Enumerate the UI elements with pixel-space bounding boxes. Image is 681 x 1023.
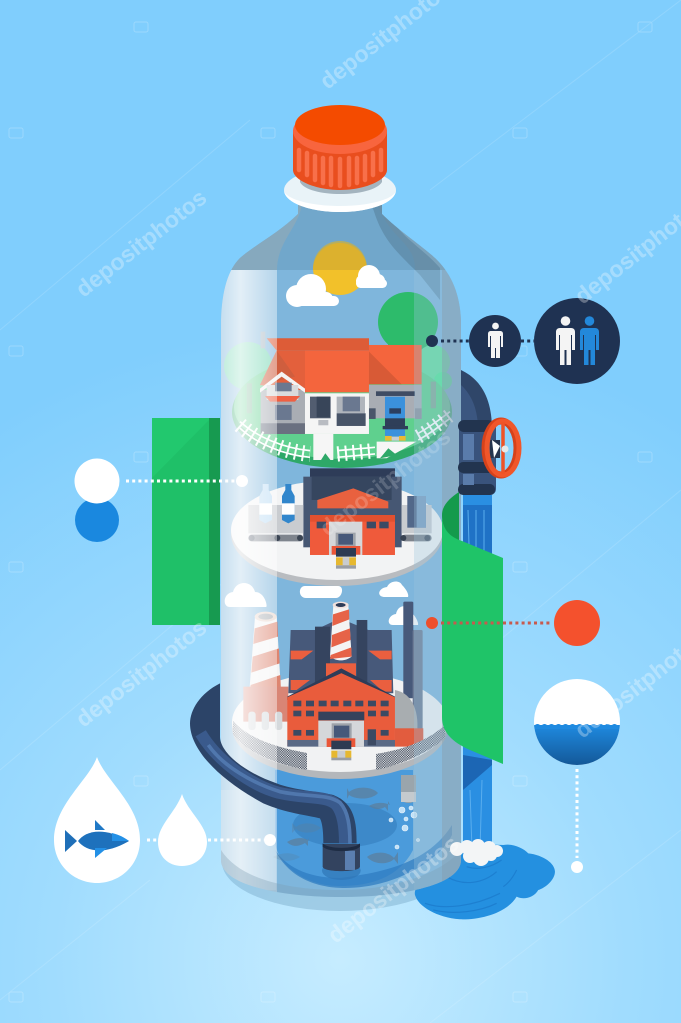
path bbox=[313, 434, 417, 460]
entry bbox=[305, 393, 369, 434]
heavy factory bbox=[243, 602, 423, 760]
left bay bbox=[260, 372, 305, 434]
icon: white person bbox=[556, 316, 575, 365]
wide water bottom bbox=[275, 825, 452, 888]
annex right bbox=[395, 728, 423, 747]
valve wheel bbox=[485, 421, 519, 475]
tree bbox=[224, 292, 452, 390]
icon: small person bbox=[488, 323, 503, 358]
bottle cap and collar bbox=[284, 105, 396, 212]
watermark: depositphotos bbox=[71, 184, 211, 302]
icon: blue person bbox=[580, 316, 599, 365]
waterfall from pipe bbox=[463, 495, 492, 855]
shrubs bbox=[320, 448, 397, 462]
green ribbon right bbox=[442, 492, 503, 764]
truck bbox=[327, 723, 355, 760]
low annex bbox=[243, 687, 288, 730]
collar bbox=[323, 843, 360, 871]
rear pipes bbox=[395, 602, 423, 737]
front hall bbox=[287, 668, 395, 747]
clouds mid bbox=[225, 581, 418, 625]
roof bbox=[260, 332, 422, 392]
garden platform bbox=[232, 355, 452, 468]
icon: fish bbox=[65, 820, 129, 858]
bottling plant bbox=[248, 468, 432, 569]
bottle icons bbox=[259, 484, 295, 523]
bottling platform bbox=[231, 480, 443, 586]
conveyor left bbox=[248, 505, 303, 541]
upper pipe and valve bbox=[458, 370, 519, 495]
callout: red circle bbox=[426, 600, 600, 646]
central chimney bbox=[330, 602, 352, 660]
bottle shadow on ground bbox=[222, 813, 458, 911]
truck bbox=[332, 533, 360, 569]
clouds in sky bbox=[286, 265, 387, 307]
callout: population bbox=[426, 298, 620, 384]
fence bbox=[240, 412, 450, 457]
callout: water drops and fish bbox=[54, 757, 276, 883]
sun bbox=[313, 241, 367, 295]
sun upper half seen through shoulder bbox=[313, 243, 367, 270]
foam bbox=[450, 839, 503, 866]
fish in water bbox=[273, 788, 398, 864]
bottle glass overlay bbox=[221, 200, 461, 900]
shoulder tint bbox=[277, 206, 415, 270]
rear halls bbox=[288, 618, 393, 693]
puddle bbox=[415, 843, 555, 919]
watermark: depositphotos bbox=[323, 830, 463, 948]
heavy factory platform bbox=[232, 672, 448, 779]
lower curving pipe bbox=[190, 683, 361, 880]
garage and truck bbox=[369, 385, 422, 441]
bubbles and drain pipe bbox=[389, 775, 420, 849]
mesh fence bbox=[233, 721, 445, 770]
house bbox=[240, 332, 450, 462]
watermark: depositphotos bbox=[71, 614, 211, 732]
green ribbon left bbox=[152, 418, 220, 625]
callout: sea level circle bbox=[530, 679, 624, 873]
conveyor right bbox=[400, 496, 432, 541]
submerged darker pool bbox=[293, 803, 397, 847]
water bbox=[275, 770, 413, 886]
big left chimney bbox=[249, 612, 281, 698]
watermark: depositphotos bbox=[315, 423, 455, 541]
callout: white and blue circles bbox=[74, 458, 248, 542]
bottle glass back bbox=[221, 200, 461, 900]
